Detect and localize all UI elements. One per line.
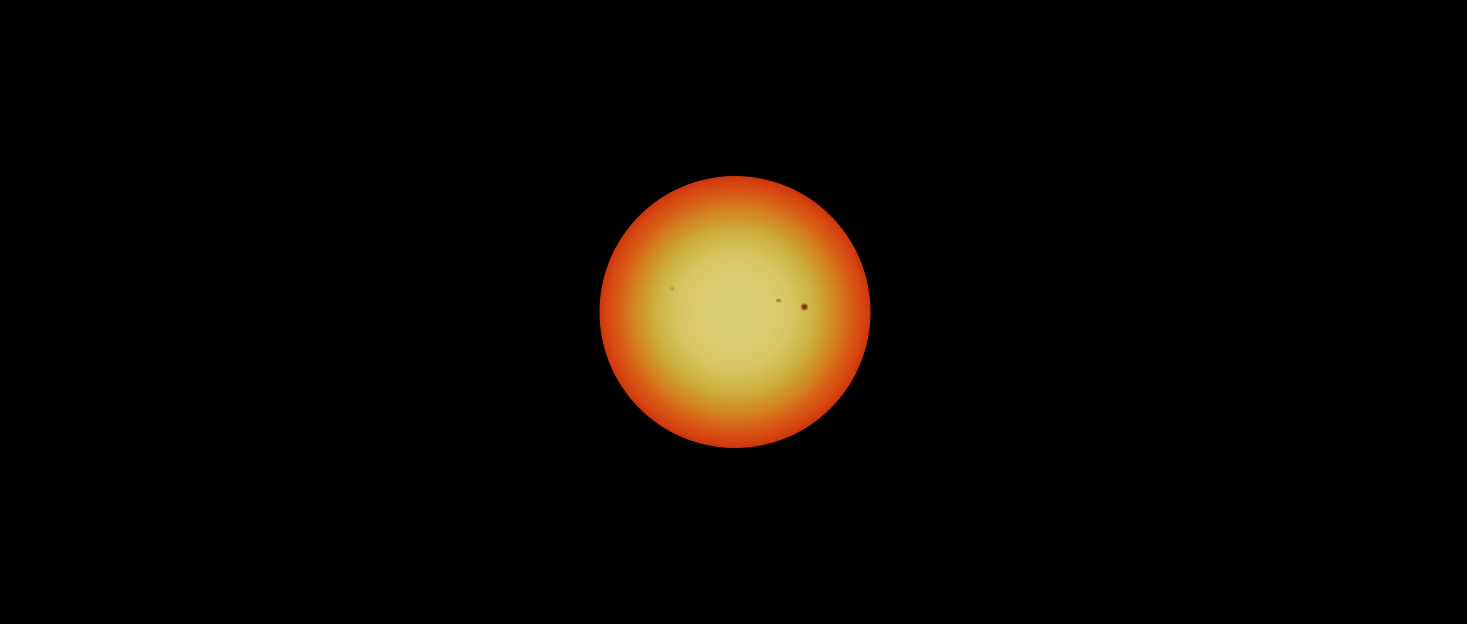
large sunspot: [801, 303, 808, 311]
sun disc: [600, 176, 870, 448]
faint left sunspot: [670, 286, 674, 290]
sunspots: [670, 286, 808, 311]
small sunspot: [776, 299, 781, 302]
